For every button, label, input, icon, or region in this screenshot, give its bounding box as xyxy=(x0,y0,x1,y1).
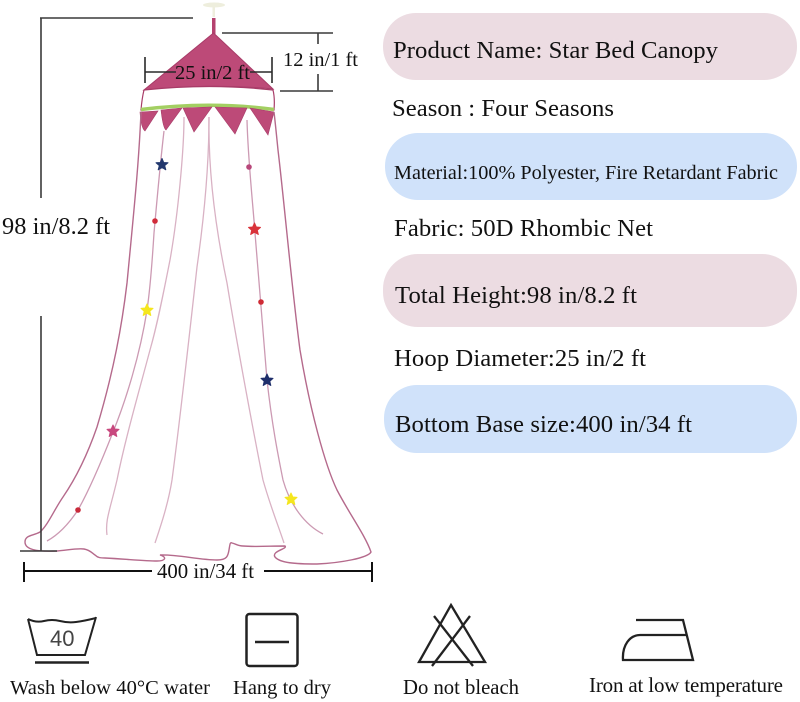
icon: iron xyxy=(623,620,693,660)
dimension: total height: 98 in/8.2 ft xyxy=(2,213,110,240)
outer curtain outline xyxy=(25,112,371,564)
icon: square with line xyxy=(246,614,298,666)
spec row: season: Season : Four Seasons xyxy=(392,95,614,122)
care item: wash: Wash below 40°C water xyxy=(10,677,210,699)
spec row: material: Material:100% Polyester, Fire Retardant Fabric xyxy=(394,162,778,184)
canopy illustration xyxy=(25,2,371,564)
spec row: total height xyxy=(383,254,797,327)
green trim xyxy=(141,105,274,110)
care item: hang to dry xyxy=(233,614,332,699)
dimension: hoop diameter xyxy=(145,57,272,84)
spec row: bottom base size xyxy=(384,385,797,453)
ceiling mount xyxy=(203,2,225,34)
spec row: material xyxy=(385,133,797,200)
dimension: cone height: 12 in/1 ft xyxy=(283,49,358,71)
dimension: bottom base: 400 in/34 ft xyxy=(157,560,254,583)
dimension: hoop diameter: 25 in/2 ft xyxy=(175,62,250,84)
canopy cone top xyxy=(144,33,273,90)
white hoop band xyxy=(141,86,274,110)
icon: crossed triangle xyxy=(419,605,485,666)
care item: iron: Iron at low temperature xyxy=(589,673,783,697)
care item: iron xyxy=(589,620,783,697)
star decorations xyxy=(75,158,297,513)
spec row: product name xyxy=(383,13,797,80)
spec row: hoop diameter: Hoop Diameter:25 in/2 ft xyxy=(394,345,646,372)
spec row: fabric: Fabric: 50D Rhombic Net xyxy=(394,215,653,242)
care item: hang to dry: Hang to dry xyxy=(233,677,332,699)
care item: wash xyxy=(10,617,210,699)
inner net strands xyxy=(47,117,323,543)
dimension: cone height xyxy=(222,33,358,91)
icon: wash tub: 40 xyxy=(50,626,74,651)
icon: wash tub xyxy=(28,617,96,662)
valance triangles xyxy=(140,107,274,135)
spec row: total height: Total Height:98 in/8.2 ft xyxy=(395,282,637,309)
spec row: bottom base size: Bottom Base size:400 in/34 ft xyxy=(395,411,692,438)
care item: do not bleach: Do not bleach xyxy=(403,677,520,699)
spec row: product name: Product Name: Star Bed Canopy xyxy=(393,37,719,64)
care item: do not bleach xyxy=(403,605,520,699)
